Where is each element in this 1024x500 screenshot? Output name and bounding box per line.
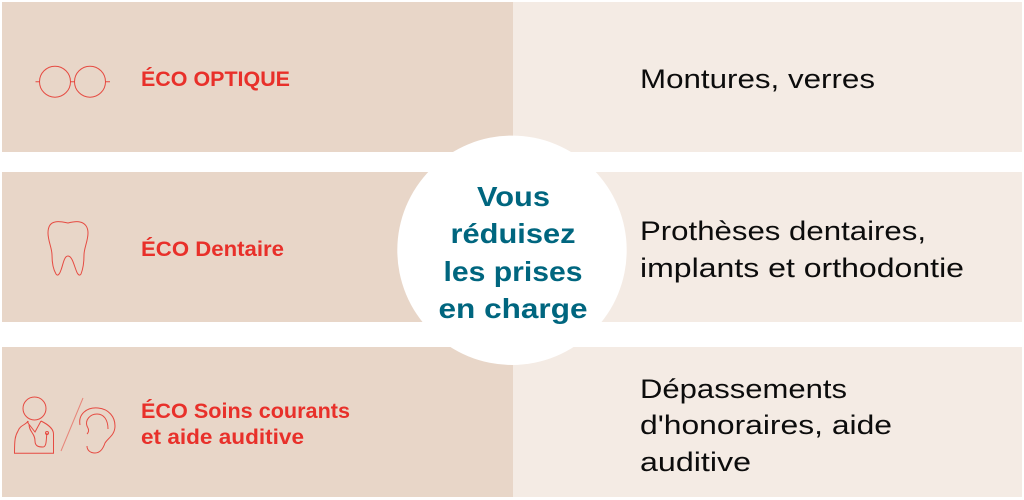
- icon: glasses: [36, 66, 110, 97]
- panel: row 3 soins: [2, 347, 1022, 497]
- callout text: les prises: [444, 256, 582, 287]
- text: protheses: implants et orthodontie: [640, 253, 964, 283]
- callout text: [438, 181, 588, 324]
- icon: tooth: [48, 222, 88, 275]
- label: eco soins: [141, 400, 350, 449]
- panel: row 2 dentaire: [2, 172, 1022, 322]
- center circle callout: [397, 136, 627, 365]
- text: protheses: Prothèses dentaires,: [640, 216, 926, 246]
- text: depassements: d'honoraires, aide: [640, 410, 892, 440]
- callout text: en charge: [438, 293, 588, 324]
- panel: row 1 optique: [2, 2, 1022, 152]
- callout text: Vous: [477, 181, 550, 212]
- callout text: réduisez: [450, 218, 576, 249]
- text: depassements: Dépassements: [640, 374, 847, 404]
- label: eco optique: ÉCO OPTIQUE: [141, 68, 290, 91]
- icon: doctor and ear: [14, 397, 115, 453]
- text: depassements: [640, 374, 892, 477]
- label: eco soins: et aide auditive: [141, 426, 304, 449]
- label: eco dentaire: ÉCO Dentaire: [141, 238, 284, 261]
- label: eco soins: ÉCO Soins courants: [141, 400, 350, 423]
- text: protheses: [640, 216, 964, 283]
- text: depassements: auditive: [640, 447, 751, 477]
- text: montures: Montures, verres: [640, 64, 875, 94]
